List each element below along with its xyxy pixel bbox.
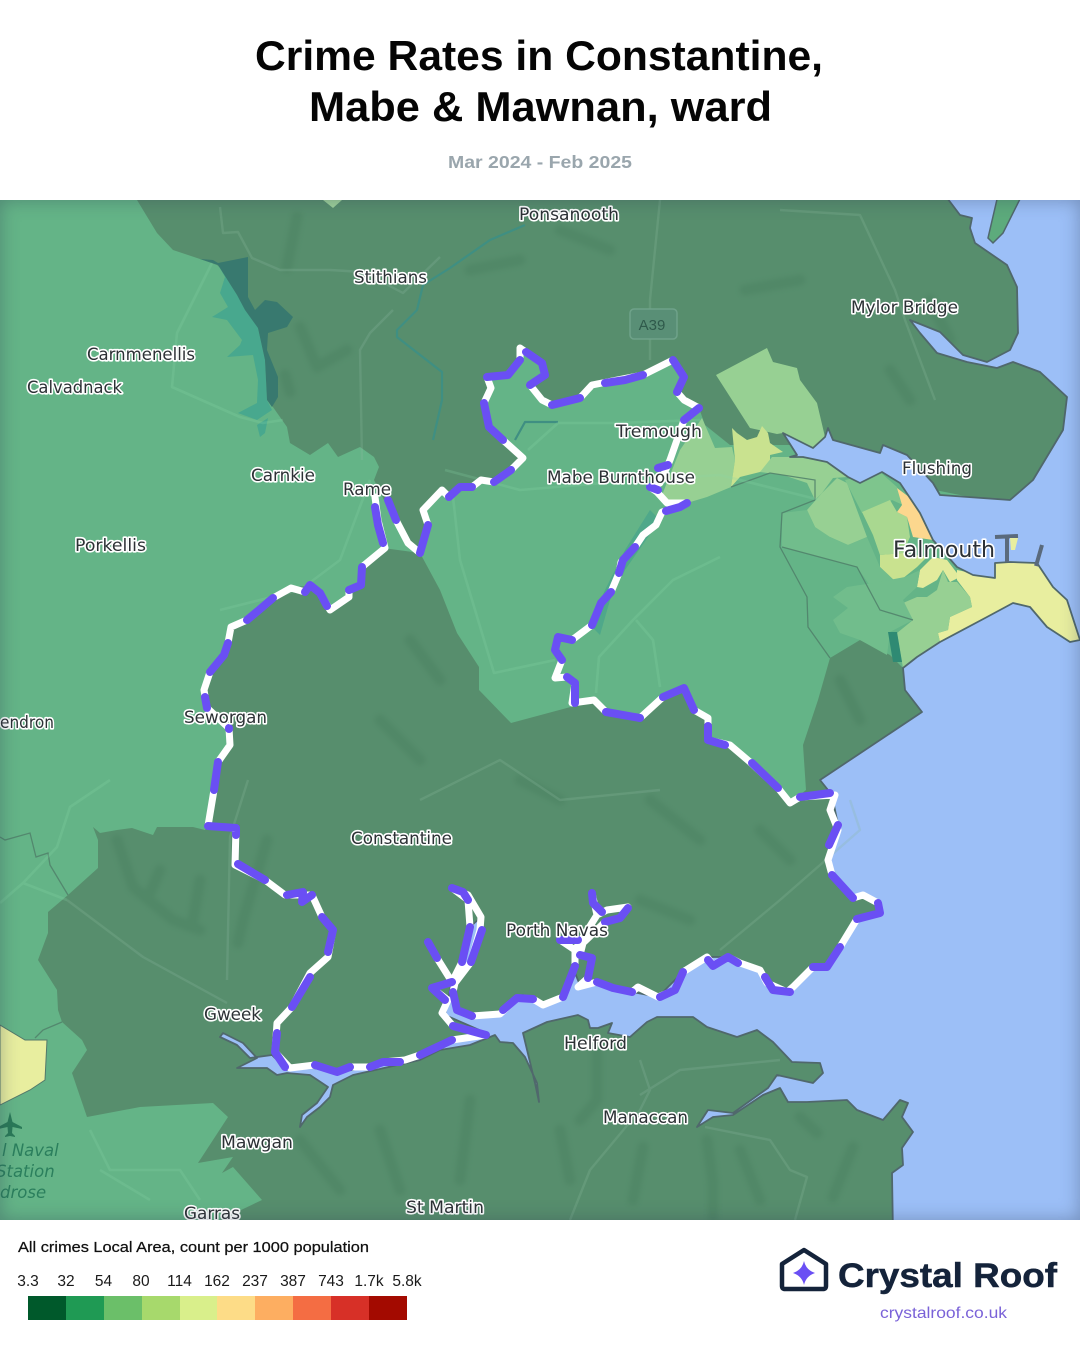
legend values: 1.7k [354,1273,384,1290]
legend values: 237 [242,1273,268,1290]
ward: highest crime orange [897,488,933,540]
legend values: 80 [132,1273,150,1290]
legend title: All crimes Local Area, count per 1000 population [18,1239,369,1256]
roads [0,263,820,1200]
ward: pale green Falmouth south [880,553,927,583]
small light patch top edge [323,200,342,208]
label: Flushing: Flushing [902,459,972,479]
legend values: 3.3 [17,1273,39,1290]
website link text: crystalroof.co.uk [880,1305,1008,1322]
label: Mawgan: Mawgan [221,1133,293,1153]
low crime dark land: central and south [38,548,1000,1220]
ward: pale yellow Falmouth [917,557,960,588]
ward boundaries [0,473,913,1038]
valley shading [117,217,950,1217]
title [255,32,823,172]
reservoir: Stithians shallow [212,265,272,420]
legend values: 162 [204,1273,230,1290]
legend values: 387 [280,1273,306,1290]
airport label: Royal Naval Air Station Culdrose [0,1141,59,1202]
offshore land: top right [988,195,1022,243]
ward: Pendennis yellow [938,563,1080,642]
boundary dashes purple [205,352,880,1072]
label: Porkellis: Porkellis [75,536,146,556]
label: Manaccan: Manaccan [603,1108,688,1128]
airport label: Royal Naval Air Station Culdrose: drose [0,1183,46,1202]
label: Carnkie: Carnkie [251,466,315,486]
label: Porth Navas: Porth Navas [506,921,608,941]
land base: lighter green areas [0,200,1080,1220]
label: Constantine: Constantine [351,829,452,849]
icon: airport plane [0,1112,22,1137]
legend values: 5.8k [392,1273,422,1290]
small pool [257,418,268,437]
title: Mar 2024 - Feb 2025 [448,152,632,172]
reservoir: Stithians deep [200,257,293,407]
Falmouth docks [995,536,1042,566]
label: Pendron clipped: endron [0,713,54,733]
label: St Martin: St Martin [406,1198,484,1218]
rivers [397,225,558,440]
icon: house with star [782,1250,826,1289]
road badge: A39 [630,309,677,339]
wards: mid green outer Falmouth [782,510,920,655]
airport label: Royal Naval Air Station Culdrose: l Naval [2,1141,59,1160]
low crime dark land: north [137,200,1080,553]
label: Seworgan: Seworgan [184,708,267,728]
ward: Falmouth centre [862,500,910,555]
ward: mid green Falmouth [845,472,903,513]
ward boundary: Constantine, Mabe and Mawnan [204,348,880,1072]
legend values [17,1273,422,1290]
map panel [0,200,1080,1220]
logo: Crystal Roof [780,1248,1058,1322]
legend colour scale [28,1296,407,1320]
legend values: 114 [167,1273,192,1290]
legend values: 743 [318,1273,344,1290]
label: Helford: Helford [564,1034,627,1054]
legend values: 54 [95,1273,112,1290]
ward: light green north of Penryn [716,348,825,448]
ward: Penryn centre [731,426,783,487]
ward: central Falmouth west [807,478,867,545]
title: Crime Rates in Constantine, [255,32,823,79]
label: Mabe Burnthouse: Mabe Burnthouse [547,468,695,488]
legend values: 32 [57,1273,75,1290]
label: Ponsanooth: Ponsanooth [519,205,619,225]
west yellow ward [0,1025,47,1105]
road badge: A39: A39 [639,317,665,334]
label: Stithians: Stithians [354,268,427,288]
label: Calvadnack: Calvadnack [27,378,122,398]
ward: Swanpool light green [897,570,972,668]
water [220,190,1080,1235]
ward: north Falmouth shore [760,457,848,500]
label: Tremough: Tremough [615,422,702,442]
label: Rame: Rame [343,480,391,500]
label: Mylor Bridge: Mylor Bridge [851,298,958,318]
legend [17,1239,422,1320]
label: Falmouth: Falmouth [893,537,995,563]
wordmark: Crystal Roof [838,1257,1058,1295]
title: Mabe & Mawnan, ward [309,83,772,130]
small inland water [888,632,902,662]
label: Gweek: Gweek [204,1005,261,1025]
boundary casing white [204,348,880,1072]
place labels [0,205,995,1224]
map edge vignette [0,200,1080,1220]
label: Carnmenellis: Carnmenellis [87,345,195,365]
ward: Penryn [662,418,735,503]
